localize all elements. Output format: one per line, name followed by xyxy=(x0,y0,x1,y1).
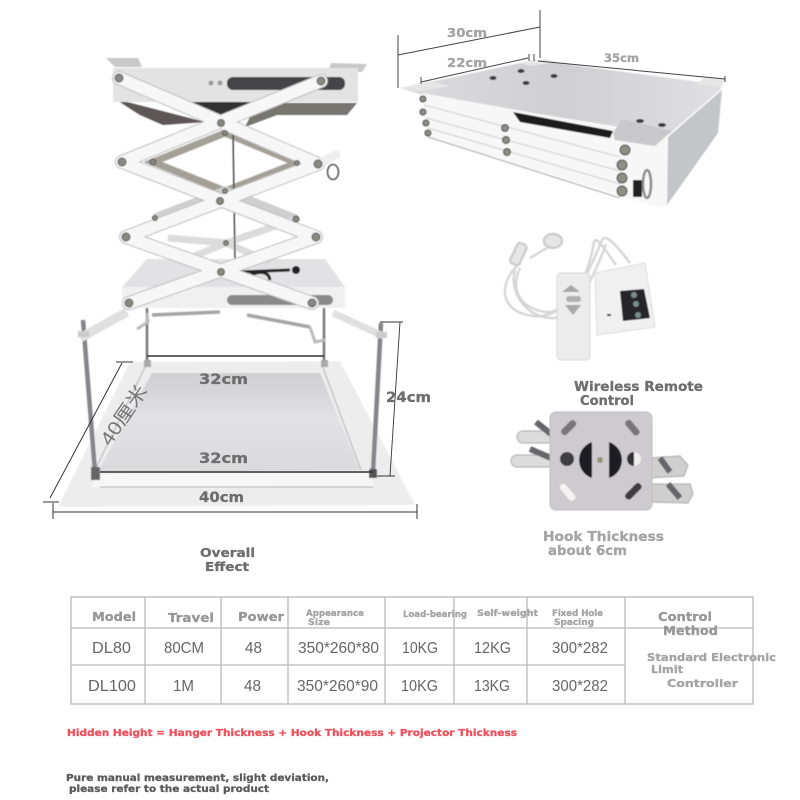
scissor arms xyxy=(119,78,336,303)
table header row: Travel xyxy=(168,610,214,625)
caption: wireless remote control: Wireless Remote xyxy=(574,380,703,395)
table header row: Load-bearing xyxy=(403,610,467,620)
bottom tray xyxy=(122,259,345,308)
control method cell: Standard Electronic xyxy=(647,652,776,664)
folded bars xyxy=(422,93,668,207)
specification table xyxy=(71,597,776,704)
panel: lift assembly photo xyxy=(58,58,415,507)
table header row: Spacing xyxy=(554,618,594,628)
table header row: Control xyxy=(658,609,712,624)
control method cell: Controller xyxy=(667,678,739,690)
table row DL80: 80CM xyxy=(164,640,204,657)
control method cell xyxy=(647,652,776,690)
square plate xyxy=(550,412,652,510)
label: 22cm: 22cm xyxy=(447,55,487,70)
top housing xyxy=(106,58,367,127)
caption: overall effect: Effect xyxy=(205,559,249,574)
hanger arms and threaded rods xyxy=(78,306,387,480)
table row DL100: 300*282 xyxy=(552,678,608,695)
table row DL80: 48 xyxy=(245,640,262,657)
table header row xyxy=(92,609,718,638)
table row DL80: 10KG xyxy=(402,640,438,657)
caption: hook thickness: about 6cm xyxy=(548,544,627,559)
table row DL80 xyxy=(92,640,608,657)
label: 32cm front: 32cm xyxy=(199,451,248,467)
table header row: Size xyxy=(308,618,330,628)
table row DL100: 48 xyxy=(244,678,261,695)
inner scissor arms xyxy=(153,133,297,262)
table row DL100 xyxy=(88,678,608,695)
footnote xyxy=(66,773,329,795)
caption: wireless remote control: Control xyxy=(580,394,634,409)
table row DL80: DL80 xyxy=(92,640,131,657)
icon: handheld remote xyxy=(557,273,590,360)
top surface xyxy=(400,60,722,135)
table header row: Appearance xyxy=(306,609,364,619)
mounting tabs xyxy=(400,59,725,91)
pivot bolts xyxy=(115,74,325,307)
slot xyxy=(513,112,613,138)
side wall xyxy=(667,90,722,205)
table row DL100: 10KG xyxy=(401,678,438,695)
label: 35cm: 35cm xyxy=(604,51,639,65)
panel: folded lift photo xyxy=(400,59,725,207)
clamp arms xyxy=(511,422,693,503)
caption: wireless remote control xyxy=(574,380,703,409)
panel: hook plate photo xyxy=(511,412,693,510)
table header row: Model xyxy=(92,609,136,624)
panel: wireless remote control photo xyxy=(505,234,655,360)
table header row: Power xyxy=(238,609,285,624)
caption: hook thickness: Hook Thickness xyxy=(543,530,664,545)
table row DL80: 300*282 xyxy=(552,640,608,657)
caption: overall effect xyxy=(200,545,255,574)
table row DL80: 12KG xyxy=(474,640,511,657)
icon: receiver box xyxy=(595,263,655,335)
table header row: Fixed Hole xyxy=(552,609,603,619)
control method cell: Limit xyxy=(651,664,683,676)
table row DL100: DL100 xyxy=(88,678,136,695)
label: 30cm: 30cm xyxy=(447,25,487,40)
table row DL80: 350*260*80 xyxy=(298,640,379,657)
footnote: Pure manual measurement, slight deviation, xyxy=(66,773,329,784)
label: 40 cm depth in Chinese: 40厘米 xyxy=(96,381,152,450)
motor and ring xyxy=(633,170,651,198)
table header row: Self-weight xyxy=(477,609,538,619)
label: 24cm height: 24cm xyxy=(386,390,431,406)
table grid xyxy=(71,597,753,704)
holes xyxy=(490,69,666,127)
label: 40cm width: 40cm xyxy=(199,490,244,506)
caption: overall effect: Overall xyxy=(200,545,255,560)
formula note in red: Hidden Height = Hanger Thickness + Hook Thickness + Projector Thickness xyxy=(67,728,517,739)
table row DL100: 350*260*90 xyxy=(297,678,378,695)
caption: hook thickness xyxy=(543,530,664,559)
icon: pull ring xyxy=(328,164,338,180)
label: 32cm back: 32cm xyxy=(199,372,248,388)
footnote: please refer to the actual product xyxy=(69,784,269,795)
power cable and plug xyxy=(505,234,630,318)
plate holes xyxy=(559,419,643,502)
table header row: Method xyxy=(663,623,718,638)
bolts xyxy=(420,96,630,196)
corner plate xyxy=(613,119,672,146)
table row DL100: 13KG xyxy=(474,678,510,695)
base plate with dimensions xyxy=(58,361,415,507)
dimension lines: lift xyxy=(43,322,417,519)
table row DL100: 1M xyxy=(173,678,194,695)
dimension lines: folded lift xyxy=(398,10,725,88)
